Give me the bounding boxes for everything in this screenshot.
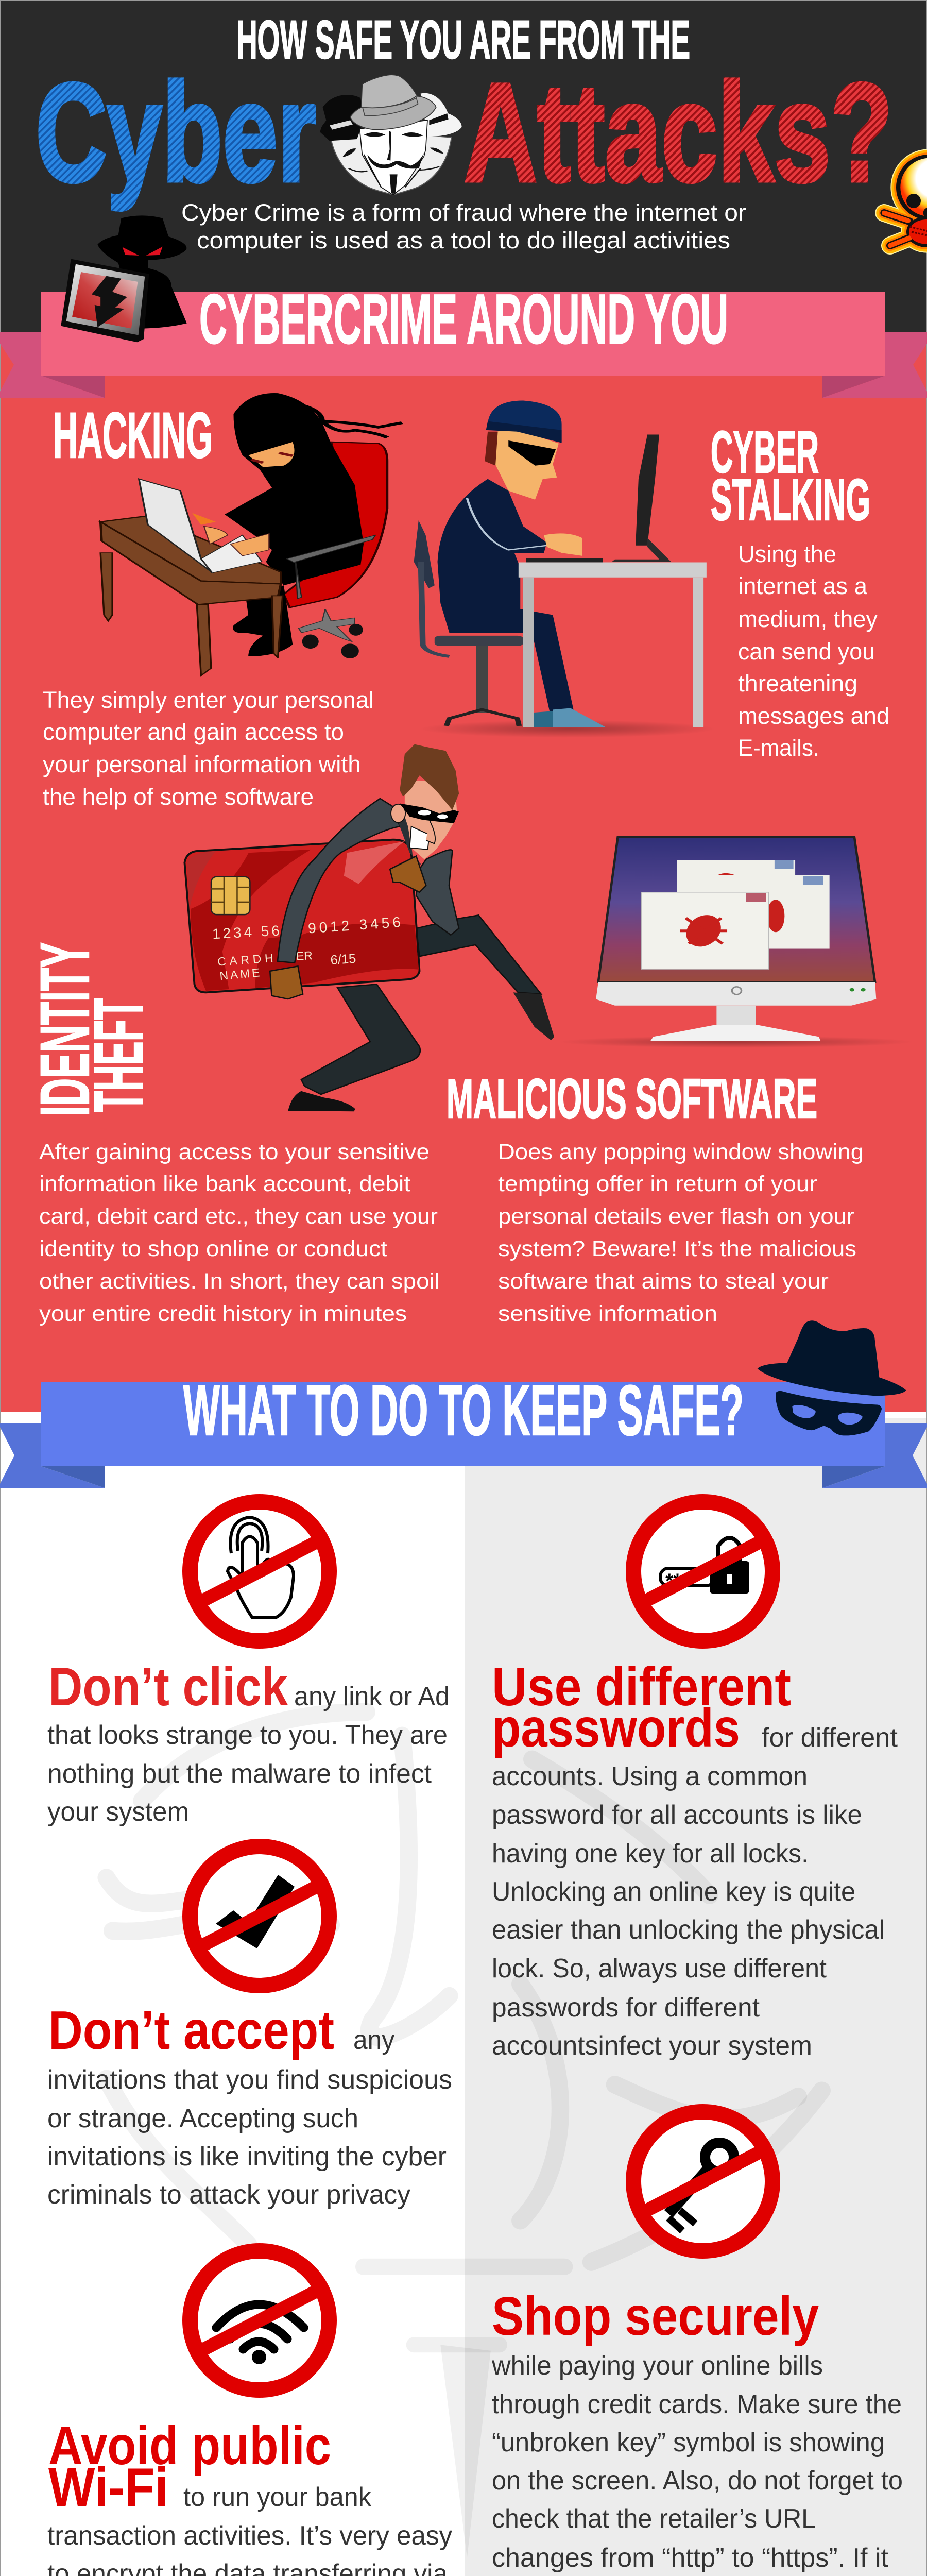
illustration: thief with credit card: 1234 56 [212, 923, 280, 942]
text: cyber stalking: E-mails. [738, 735, 819, 761]
text: identity theft: After gaining access to your sensitive [39, 1140, 430, 1164]
text: identity theft: card, debit card etc., they can use your [39, 1204, 438, 1229]
illustration: stalker at computer [414, 400, 715, 738]
heading and text: don't click: nothing but the malware to infect [47, 1759, 432, 1789]
heading and text: don't accept [47, 2000, 452, 2210]
text: malicious software: personal details ever flash on your [498, 1204, 854, 1229]
icon: no key [633, 2112, 772, 2251]
icon: no public wifi [190, 2251, 329, 2390]
heading and text: don't click: Don’t click [48, 1656, 288, 1717]
text: cyber stalking: messages and [738, 703, 889, 729]
heading and text: don't accept: invitations that you find suspicious [47, 2065, 452, 2095]
tips section top white stripe [0, 1412, 927, 1418]
text: malicious software: software that aims to steal your [498, 1269, 829, 1294]
heading and text: use different passwords: lock. So, always use different [492, 1954, 827, 1984]
heading and text: shop securely: through credit cards. Make sure the [492, 2389, 902, 2419]
heading and text: don't click: that looks strange to you. They are [47, 1720, 448, 1750]
text: hacking: computer and gain access to [43, 719, 344, 745]
text: malicious software [498, 1140, 864, 1326]
tips section left background [0, 1418, 465, 2576]
intro text: Cyber Crime is a form of fraud where the internet or [181, 199, 746, 226]
header background [0, 0, 927, 361]
text: cyber stalking: Using the [738, 541, 836, 567]
heading and text: avoid public wi-fi: transaction activities. It’s very easy [47, 2521, 452, 2551]
heading: cyber stalking: CYBER [711, 419, 819, 485]
heading and text: use different passwords: Unlocking an online key is quite [492, 1877, 855, 1907]
illustration: thief with credit card: CARDH [217, 951, 273, 969]
heading and text: shop securely: Shop securely [492, 2286, 819, 2347]
heading and text: don't click: any link or Ad [294, 1682, 450, 1711]
heading and text: don't accept: Don’t accept [48, 2000, 334, 2061]
text: identity theft: information like bank account, debit [39, 1172, 410, 1196]
tips section right background [465, 1418, 927, 2576]
heading and text: use different passwords: Use different [492, 1656, 791, 1717]
text: cyber stalking: threatening [738, 670, 857, 697]
heading and text: shop securely: “unbroken key” symbol is showing [492, 2428, 885, 2458]
heading and text: avoid public wi-fi: to run your bank [183, 2482, 372, 2512]
heading and text: avoid public wi-fi: Avoid public [48, 2415, 331, 2476]
text: identity theft: your entire credit history in minutes [39, 1301, 407, 1326]
text: cyber stalking: medium, they [738, 606, 878, 632]
heading and text: shop securely: while paying your online bills [491, 2351, 823, 2381]
text: cyber stalking [738, 541, 889, 761]
heading: cyber stalking [711, 419, 870, 532]
icon: no shared password [633, 1502, 772, 1641]
heading and text: shop securely: on the screen. Also, do not forget to [492, 2466, 903, 2496]
text: identity theft: other activities. In short, they can spoil [39, 1269, 440, 1294]
illustration: thief with credit card: NAME [219, 965, 260, 982]
ribbon: cybercrime around you [0, 280, 927, 398]
heading and text: use different passwords: accounts. Using a common [492, 1761, 808, 1791]
heading and text: use different passwords: accountsinfect your system [492, 2031, 812, 2061]
text: cyber stalking: can send you [738, 638, 875, 665]
text: malicious software: Does any popping window showing [498, 1140, 864, 1164]
heading and text: shop securely: changes from “http” to “https”. If it [492, 2543, 889, 2573]
heading and text: shop securely [491, 2286, 903, 2576]
icon: no accepting [190, 1846, 329, 1986]
heading: hacking: HACKING [53, 400, 213, 471]
ribbon: what to do to keep safe [0, 1371, 927, 1488]
watermark: mask [107, 1712, 822, 2558]
illustration: ninja hacker at desk [100, 393, 402, 675]
heading: identity theft [27, 942, 157, 1116]
illustration: thief with credit card: 6/15 [330, 952, 356, 968]
text: hacking: They simply enter your personal [43, 687, 374, 713]
text: malicious software: tempting offer in return of your [498, 1172, 817, 1196]
heading and text: don't accept: any [353, 2025, 394, 2055]
intro text: computer is used as a tool to do illegal activities [197, 227, 730, 253]
illustration: thief with credit card [184, 744, 554, 1111]
text: identity theft [39, 1140, 440, 1326]
heading and text: use different passwords: passwords [492, 1698, 740, 1758]
heading and text: use different passwords: password for all accounts is like [492, 1800, 862, 1830]
icon: warning tablet [61, 259, 149, 342]
heading and text: don't click: your system [47, 1797, 189, 1827]
heading and text: use different passwords: easier than unlocking the physical [492, 1915, 885, 1945]
heading and text: don't accept: invitations is like inviting the cyber [47, 2142, 447, 2172]
text: hacking: the help of some software [43, 784, 314, 810]
icon: spy hat and mask [758, 1320, 906, 1435]
heading and text: use different passwords: having one key for all locks. [492, 1839, 809, 1869]
text: hacking [43, 687, 374, 810]
heading and text: don't accept: or strange. Accepting such [47, 2104, 358, 2133]
heading and text: don't click [47, 1656, 450, 1827]
illustration: thief with credit card: 9012 3456 [307, 914, 401, 936]
heading and text: use different passwords: for different [762, 1723, 898, 1753]
icon: hooded hacker silhouette [97, 215, 187, 329]
illustration: thief with credit card: ER [296, 948, 313, 963]
heading and text: avoid public wi-fi [47, 2415, 452, 2576]
heading and text: use different passwords [492, 1656, 898, 2061]
text: cyber stalking: internet as a [738, 573, 868, 599]
heading: identity theft: IDENTITY [27, 942, 104, 1116]
heading and text: avoid public wi-fi: Wi-Fi [48, 2457, 168, 2518]
title word: Cyber: Cyber [36, 54, 316, 211]
heading and text: don't accept: criminals to attack your privacy [47, 2180, 410, 2210]
intro text [181, 199, 746, 253]
icon: no clicking [190, 1502, 329, 1641]
icon: flaming skull [884, 156, 927, 246]
text: hacking: your personal information with [43, 751, 361, 777]
illustration: monitor with malware popups [559, 837, 914, 1048]
crime section background [0, 332, 927, 1412]
text: malicious software: sensitive information [498, 1301, 717, 1326]
text: identity theft: identity to shop online or conduct [39, 1236, 387, 1261]
icon: masks with hats [320, 75, 462, 195]
heading and text: shop securely: check that the retailer’s URL [492, 2504, 816, 2534]
text: malicious software: system? Beware! It’s the malicious [498, 1236, 856, 1261]
heading: identity theft: THEFT [80, 998, 157, 1112]
heading and text: use different passwords: passwords for different [492, 1993, 760, 2023]
icon: no shared password: *** [665, 1570, 690, 1592]
